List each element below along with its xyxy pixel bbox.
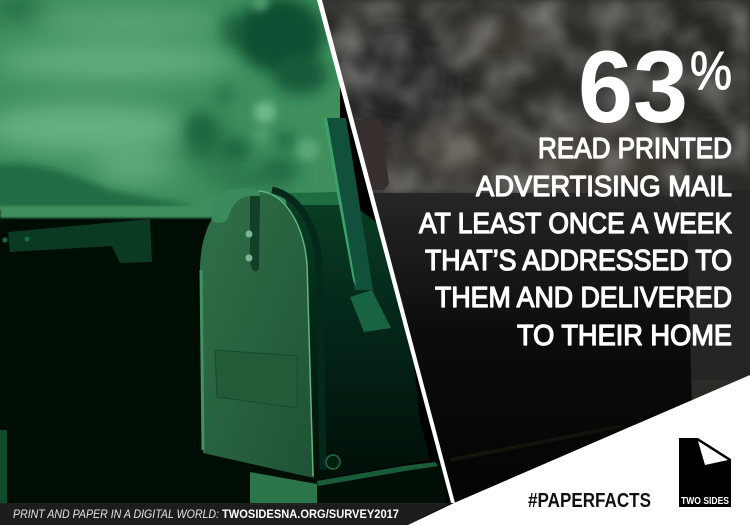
footer band [0, 503, 451, 525]
big statistic: % [690, 41, 732, 101]
bolt [326, 455, 340, 469]
far wall [682, 190, 735, 195]
mailbox body [285, 192, 430, 480]
statement text: ADVERTISING MAIL [476, 171, 732, 203]
big statistic: 63 [578, 30, 688, 144]
footer text [13, 507, 399, 521]
blurred foliage [350, 11, 673, 191]
footer text: PRINT AND PAPER IN A DIGITAL WORLD: [13, 507, 219, 521]
statement text: THEM AND DELIVERED [435, 282, 732, 314]
mailbox post [250, 462, 446, 505]
statement text: TO THEIR HOME [517, 320, 732, 352]
statement text [419, 133, 733, 352]
statement text: THAT’S ADDRESSED TO [425, 245, 732, 277]
mailbox door [200, 188, 340, 478]
footer text: TWOSIDESNA.ORG/SURVEY2017 [222, 507, 399, 521]
white corner panel [408, 375, 750, 525]
ledge and dark background [0, 206, 340, 525]
blurred sky and trees [0, 0, 340, 215]
highlight line [450, 425, 620, 462]
brown flag shape [352, 120, 389, 190]
dark tree foliage [186, 0, 328, 182]
statement text: READ PRINTED [538, 133, 732, 165]
mailbox flag [323, 118, 391, 332]
dark mailbox shape [373, 193, 692, 504]
foliage mottling [319, 0, 750, 195]
icon: Two Sides logo [679, 438, 731, 507]
hashtag: #PAPERFACTS [528, 490, 651, 512]
latch [211, 188, 260, 223]
label plate [215, 350, 297, 408]
distant hill [0, 163, 190, 215]
panel: green mailbox photo [0, 0, 446, 525]
panel: dark photo [319, 0, 750, 525]
icon: Two Sides logo: TWO SIDES [681, 496, 729, 507]
white divider line [317, 0, 455, 503]
